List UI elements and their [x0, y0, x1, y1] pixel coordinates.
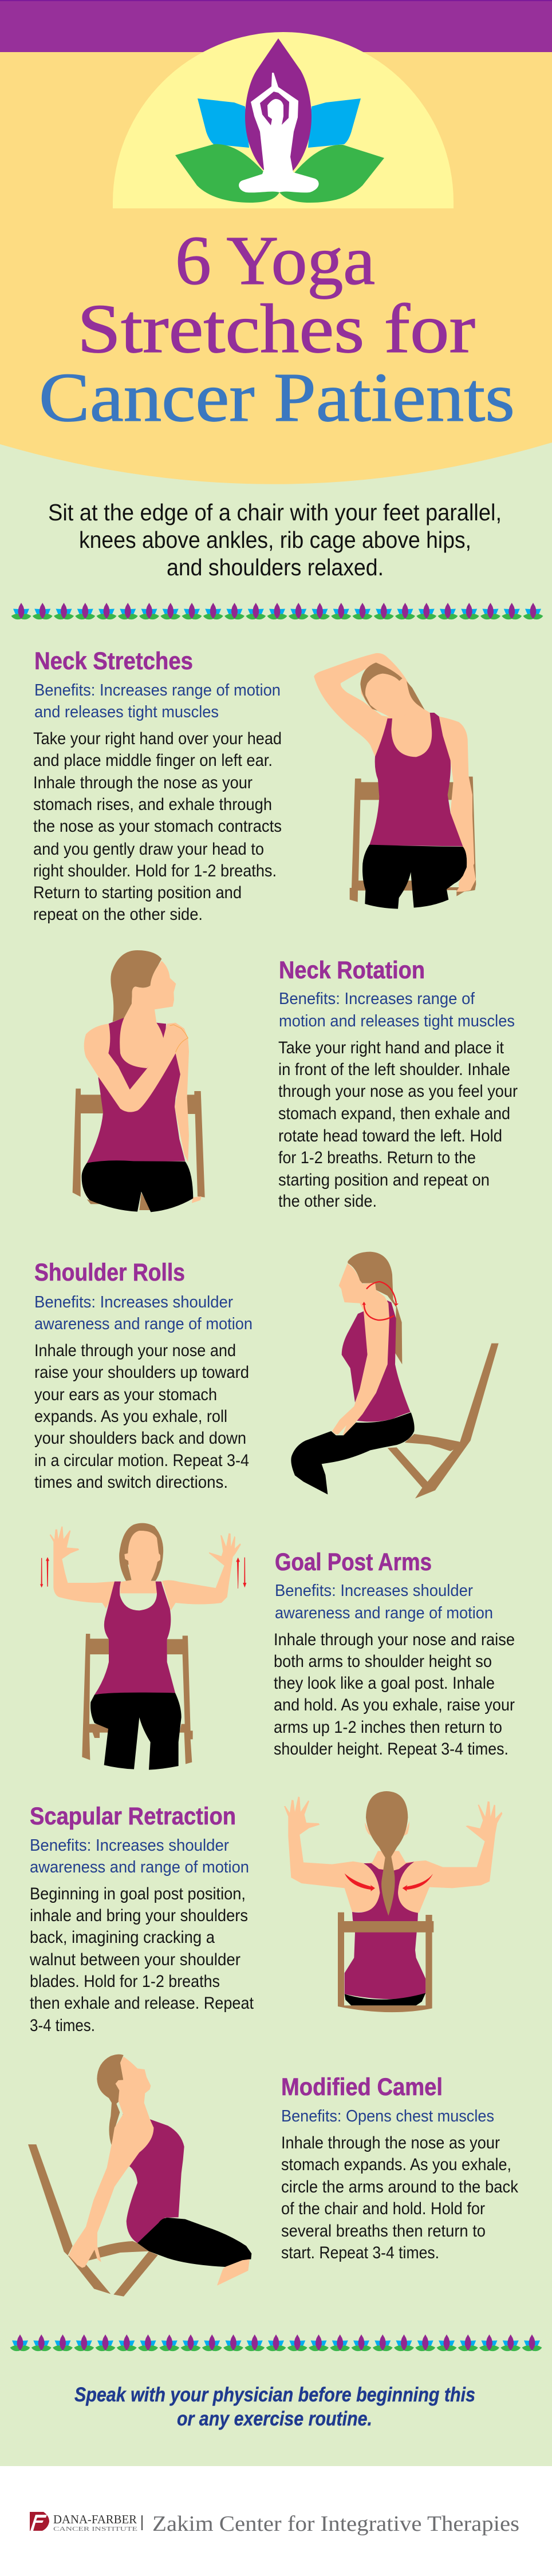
panel: modified camel text: Benefits: Opens chest muscles	[281, 2107, 494, 2125]
panel: shoulder rolls text	[34, 1259, 253, 1492]
panel: scapular retraction text: inhale and bring your shoulders	[30, 1906, 248, 1925]
panel: neck stretches text: Inhale through the nose as your	[33, 773, 253, 792]
lotus divider top	[11, 603, 543, 619]
footer panel	[0, 2466, 552, 2576]
top purple band	[0, 0, 552, 52]
intro text: knees above ankles, rib cage above hips,	[79, 527, 471, 553]
panel: goal post arms text: and hold. As you exhale, raise your	[274, 1696, 515, 1714]
panel: neck rotation text: Neck Rotation	[279, 957, 425, 984]
panel: neck stretches text	[33, 647, 282, 924]
panel: modified camel text	[281, 2073, 519, 2262]
panel: modified camel text: Modified Camel	[281, 2073, 443, 2101]
panel: goal post arms text: both arms to shoulder height so	[274, 1652, 492, 1671]
panel: shoulder rolls text: in a circular motion. Repeat 3-4	[34, 1451, 249, 1470]
logo text: Dana-Farber Cancer Institute: DANA-FARBER	[53, 2512, 137, 2526]
title	[39, 222, 515, 436]
panel: goal post arms text: Inhale through your nose and raise	[274, 1630, 515, 1649]
title: Cancer Patients	[39, 359, 515, 436]
header panel: yellow wave	[0, 0, 552, 484]
panel: neck stretches text: Neck Stretches	[34, 647, 193, 675]
panel: scapular retraction text	[29, 1803, 254, 2035]
panel: neck rotation text: starting position and repeat on	[278, 1171, 490, 1190]
figure: goal post arms	[40, 1523, 246, 1770]
lotus divider bottom	[10, 2334, 542, 2351]
panel: modified camel text: start. Repeat 3-4 times.	[281, 2243, 439, 2262]
title: 6 Yoga	[175, 222, 375, 299]
logo text: Dana-Farber Cancer Institute	[53, 2512, 137, 2532]
panel: neck stretches text: repeat on the other side.	[33, 905, 203, 924]
figure: neck rotation	[73, 950, 205, 1212]
intro text	[48, 499, 502, 580]
logo: Dana-Farber shield	[30, 2512, 49, 2531]
intro text: Sit at the edge of a chair with your feet parallel,	[48, 499, 502, 526]
figure: modified camel	[28, 2055, 251, 2297]
panel: goal post arms text: Goal Post Arms	[275, 1548, 432, 1576]
panel: neck rotation text: Benefits: Increases range of	[279, 990, 475, 1008]
panel: neck stretches text: right shoulder. Hold for 1-2 breaths.	[33, 862, 277, 880]
panel: neck rotation text: for 1-2 breaths. Return to the	[278, 1148, 476, 1167]
panel: scapular retraction text: awareness and range of motion	[30, 1858, 249, 1876]
figure: scapular retraction	[284, 1791, 502, 2012]
panel: modified camel text: circle the arms around to the back	[281, 2178, 519, 2196]
panel: shoulder rolls text: Inhale through your nose and	[34, 1341, 236, 1360]
panel: scapular retraction text: Scapular Retraction	[30, 1803, 236, 1830]
panel: neck stretches text: Take your right hand over your head	[33, 729, 282, 748]
panel: neck rotation text: Take your right hand and place it	[278, 1038, 504, 1057]
panel: neck rotation text	[278, 957, 518, 1211]
intro text: and shoulders relaxed.	[167, 554, 384, 580]
closing note: or any exercise routine.	[177, 2408, 372, 2430]
panel: scapular retraction text: Beginning in goal post position,	[30, 1884, 246, 1903]
panel: goal post arms text: they look like a goal post. Inhale	[274, 1674, 495, 1693]
panel: shoulder rolls text: times and switch directions.	[34, 1473, 228, 1492]
title: Stretches for	[77, 290, 475, 368]
panel: neck rotation text: in front of the left shoulder. Inhale	[278, 1060, 510, 1079]
closing note	[74, 2384, 475, 2430]
panel: scapular retraction text: 3-4 times.	[30, 2016, 95, 2035]
panel: scapular retraction text: back, imagining cracking a	[30, 1928, 215, 1947]
panel: neck stretches text: and place middle finger on left ear.	[33, 751, 273, 770]
figure: shoulder rolls	[291, 1252, 499, 1499]
panel: neck stretches text: Return to starting position and	[33, 883, 242, 902]
icon: lotus with meditating figure	[175, 38, 384, 203]
figure: neck stretch	[314, 653, 476, 909]
panel: neck rotation text: the other side.	[278, 1192, 377, 1211]
logo text: Dana-Farber Cancer Institute: CANCER INSTITUTE	[53, 2526, 137, 2532]
logo divider bar	[141, 2515, 143, 2530]
closing note: Speak with your physician before beginning this	[74, 2384, 475, 2406]
panel: modified camel text: several breaths then return to	[281, 2222, 486, 2241]
panel: neck rotation text: rotate head toward the left. Hold	[278, 1127, 502, 1145]
panel: goal post arms text	[274, 1548, 515, 1759]
panel: scapular retraction text: then exhale and release. Repeat	[30, 1994, 254, 2013]
panel: neck stretches text: stomach rises, and exhale through	[33, 795, 272, 814]
panel: neck rotation text: through your nose as you feel your	[278, 1082, 518, 1101]
panel: neck rotation text: motion and releases tight muscles	[279, 1012, 515, 1030]
panel: scapular retraction text: blades. Hold for 1-2 breaths	[30, 1972, 220, 1991]
panel: modified camel text: stomach expands. As you exhale,	[281, 2155, 511, 2174]
panel: shoulder rolls text: Benefits: Increases shoulder	[34, 1293, 233, 1311]
panel: shoulder rolls text: awareness and range of motion	[34, 1315, 253, 1333]
panel: shoulder rolls text: raise your shoulders up toward	[34, 1363, 249, 1382]
panel: scapular retraction text: Benefits: Increases shoulder	[30, 1836, 229, 1855]
panel: shoulder rolls text: your shoulders back and down	[34, 1429, 246, 1448]
panel: neck stretches text: and you gently draw your head to	[33, 840, 264, 859]
panel: goal post arms text: arms up 1-2 inches then return to	[274, 1718, 502, 1737]
panel: scapular retraction text: walnut between your shoulder	[29, 1950, 240, 1969]
sun semicircle	[113, 32, 454, 208]
panel: neck stretches text: Benefits: Increases range of motion	[34, 681, 281, 700]
panel: goal post arms text: awareness and range of motion	[275, 1604, 493, 1622]
footer text: Zakim Center: Zakim Center for Integrative Therapies	[152, 2512, 519, 2536]
panel: shoulder rolls text: expands. As you exhale, roll	[34, 1407, 227, 1426]
panel: shoulder rolls text: Shoulder Rolls	[34, 1259, 185, 1286]
panel: neck stretches text: the nose as your stomach contracts	[33, 817, 282, 836]
panel: goal post arms text: shoulder height. Repeat 3-4 times.	[274, 1740, 508, 1759]
panel: neck rotation text: stomach expand, then exhale and	[278, 1104, 510, 1123]
panel: modified camel text: of the chair and hold. Hold for	[281, 2199, 485, 2218]
panel: goal post arms text: Benefits: Increases shoulder	[275, 1582, 473, 1600]
panel: shoulder rolls text: your ears as your stomach	[34, 1385, 217, 1404]
panel: neck stretches text: and releases tight muscles	[34, 703, 219, 721]
panel: modified camel text: Inhale through the nose as your	[281, 2134, 500, 2152]
